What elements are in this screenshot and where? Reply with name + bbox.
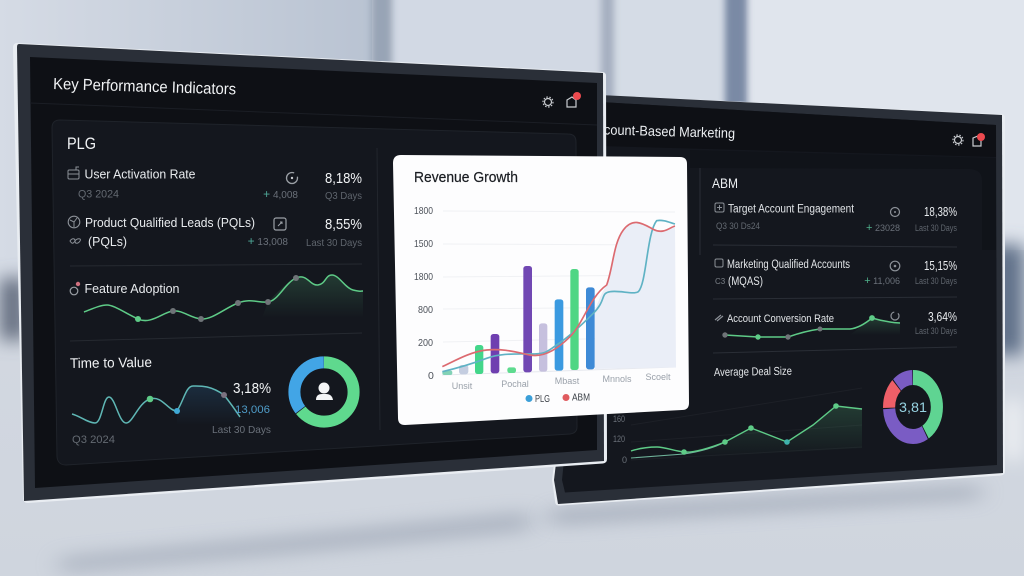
x axis labels: Pochal [501,379,529,389]
row: Product Qualified Leads: Product Qualified Leads (PQLs) [85,215,255,230]
row: Marketing Qualified Accounts [715,259,957,288]
row: Target Account Engagement: + 23028 [866,222,900,234]
row: Marketing Qualified Accounts: 15,15% [924,259,957,273]
donut: average deal size 3,81 [889,378,937,436]
y axis labels [414,205,434,382]
row: Product Qualified Leads [68,215,362,249]
block: Time to Value chart: Q3 2024 [72,434,115,446]
left monitor: key performance indicators [13,43,607,503]
right monitor: account-based marketing [552,95,1005,506]
x axis labels: Mbast [555,376,580,386]
block: Time to Value chart: 3,18% [233,381,271,397]
row: Account Conversion Rate with sparkline: Account Conversion Rate [727,313,834,325]
y axis labels: 200 [418,337,433,349]
row: User Activation Rate: User Activation Rate [84,166,196,182]
row: Target Account Engagement: Last 30 Days [915,223,957,233]
row: User Activation Rate: Q3 2024 [78,188,119,200]
heading: Revenue Growth: Revenue Growth [414,170,518,186]
legend [526,392,590,405]
block: Time to Value chart: Last 30 Days [212,424,271,436]
row: Marketing Qualified Accounts: Marketing Qualified Accounts [727,259,850,271]
card: Revenue Growth chart [393,155,689,425]
chart: average deal size line: 0 [622,455,627,465]
x axis labels [452,372,671,391]
chart: average deal size line [613,388,862,465]
row: Feature Adoption sparkline: Feature Adoption [84,281,180,296]
block: Time to Value chart: 13,006 [235,404,270,416]
y axis labels: 1800 [414,205,433,217]
donut: average deal size 3,81: 3,81 [899,399,927,415]
bars [442,266,595,375]
y axis labels: 0 [428,370,434,382]
chart: average deal size line: 160 [613,414,625,424]
row: Feature Adoption sparkline [70,275,363,322]
donut: user share [294,362,354,422]
row: User Activation Rate [68,166,362,202]
chart: area and lines [442,220,676,375]
row: Product Qualified Leads: Last 30 Days [306,237,362,249]
legend: PLG [535,394,550,405]
heading: ABM: ABM [712,175,738,191]
panel: PLG [67,134,380,446]
row: Marketing Qualified Accounts: C3 [715,277,726,286]
row: Marketing Qualified Accounts: + 11,006 [864,275,900,287]
row: User Activation Rate: Q3 Days [325,190,362,202]
y axis labels: 1800 [414,271,433,283]
row: Account Conversion Rate with sparkline: 3,64% [928,310,957,324]
icon: settings gear [543,97,553,107]
row: Account Conversion Rate with sparkline [715,310,957,340]
row: Target Account Engagement: Q3 30 Ds24 [716,221,760,232]
legend: ABM [572,392,590,404]
row: Product Qualified Leads: + 13,008 [248,234,288,248]
x axis labels: Mnnols [602,374,632,384]
row: Account Conversion Rate with sparkline: Last 30 Days [915,326,957,336]
row: Marketing Qualified Accounts: (MQAS) [728,276,763,288]
y axis labels: 1500 [414,238,433,250]
row: Product Qualified Leads: (PQLs) [88,234,127,249]
row: Target Account Engagement: Target Account Engagement [728,204,855,216]
block: Time to Value chart: Time to Value [70,354,152,371]
icon: notification with red dot [973,133,985,146]
icon: notification with red dot [567,92,581,107]
x axis labels: Scoelt [645,372,671,382]
row: User Activation Rate: 8,18% [325,171,362,187]
icon: settings gear [953,135,963,145]
row: Marketing Qualified Accounts: Last 30 Days [915,276,957,286]
chart: average deal size line: 120 [613,434,625,444]
panel: ABM [700,168,957,353]
heading: PLG: PLG [67,134,96,153]
row: User Activation Rate: + 4,008 [263,187,298,201]
x axis labels: Unsit [452,381,473,391]
row: Target Account Engagement [715,203,957,234]
heading: Account-Based Marketing: Account-Based Marketing [589,121,735,141]
row: Target Account Engagement: 18,38% [924,205,957,219]
block: Time to Value chart [70,354,271,446]
y axis labels: 800 [418,304,433,316]
heading: Key Performance Indicators: Key Performance Indicators [53,76,236,98]
row: Product Qualified Leads: 8,55% [325,217,362,233]
heading: Average Deal Size: Average Deal Size [714,366,792,379]
